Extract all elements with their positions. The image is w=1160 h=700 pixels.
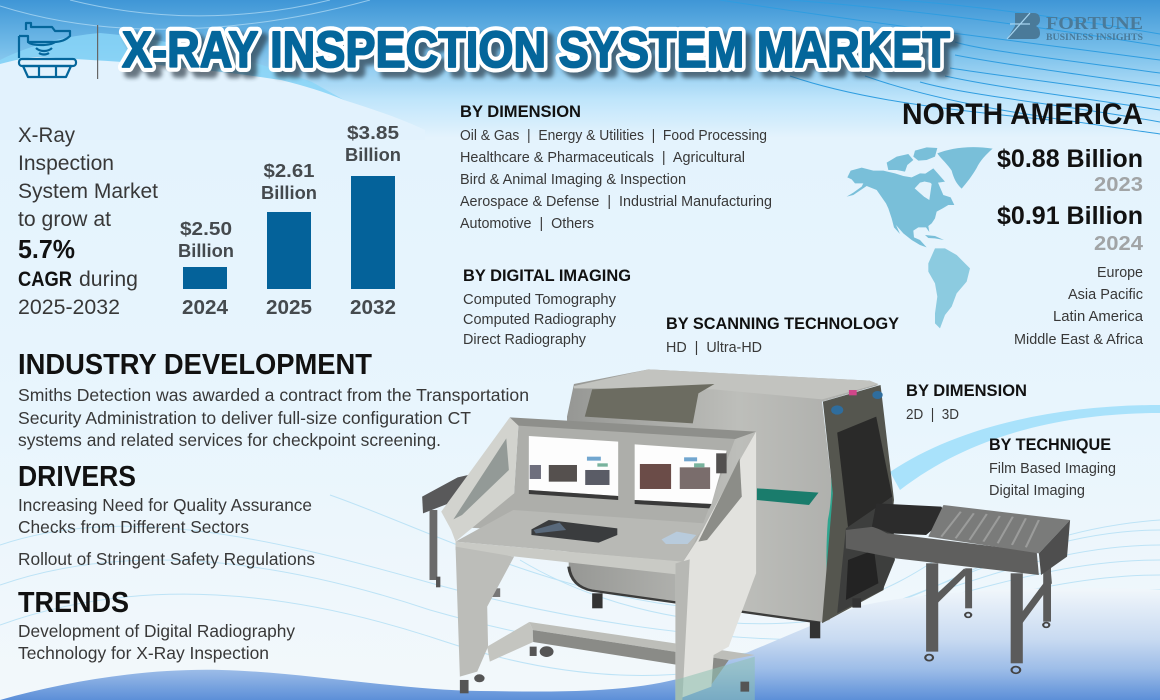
bar 2024: Billion bbox=[178, 240, 234, 261]
right monitor bbox=[635, 444, 727, 508]
segment: by dimension 2d 3d bbox=[906, 381, 1027, 423]
desk left leg bbox=[456, 547, 514, 677]
bar 2024 bbox=[178, 218, 234, 319]
segment: by technique bbox=[989, 435, 1116, 499]
segment: by dimension (industries): Bird & Animal Imaging & Inspection bbox=[460, 171, 686, 188]
bar 2025: Billion bbox=[261, 182, 317, 203]
north america stats: Middle East & Africa bbox=[1014, 331, 1144, 348]
desk surface bbox=[456, 510, 705, 562]
left conveyor bbox=[422, 466, 508, 587]
bar chart bbox=[178, 122, 401, 319]
title: X-RAY INSPECTION SYSTEM MARKET bbox=[122, 21, 950, 78]
desk right panel bbox=[675, 432, 756, 700]
segment: by technique: Digital Imaging bbox=[989, 482, 1085, 499]
segment: by dimension (industries): Automotive | Others bbox=[460, 215, 594, 232]
north america stats: $0.91 Billion bbox=[997, 202, 1143, 230]
segment: by dimension 2d 3d: 2D | 3D bbox=[906, 406, 959, 423]
north america stats: Europe bbox=[1097, 264, 1143, 281]
drivers: Checks from Different Sectors bbox=[18, 517, 249, 537]
hudson bay bbox=[915, 181, 932, 200]
bar 2025: $2.61 bbox=[264, 160, 314, 181]
industry development: INDUSTRY DEVELOPMENT bbox=[18, 349, 372, 381]
desk front edge bbox=[456, 542, 683, 575]
segment: by digital imaging: Direct Radiography bbox=[463, 331, 586, 348]
text: cagr statement: CAGR bbox=[18, 268, 72, 291]
logo: fortune business insights: FORTUNE bbox=[1046, 13, 1143, 33]
desk papers bbox=[662, 532, 696, 544]
divider line bbox=[97, 25, 98, 79]
desk top bar bbox=[510, 417, 756, 439]
trends: Technology for X-Ray Inspection bbox=[18, 643, 269, 663]
scanner body bbox=[567, 369, 878, 623]
drivers: Increasing Need for Quality Assurance bbox=[18, 495, 312, 515]
illustration: x-ray inspection machine bbox=[422, 369, 1070, 700]
south america bbox=[928, 248, 970, 328]
text: cagr statement bbox=[18, 124, 158, 319]
bar 2024: $2.50 bbox=[180, 218, 232, 239]
bar 2024: 2024 bbox=[182, 297, 229, 319]
segment: by technique: BY TECHNIQUE bbox=[989, 435, 1111, 454]
bar 2025: 2025 bbox=[266, 297, 312, 319]
segment: by dimension (industries): Aerospace & Defense | Industrial Manufacturing bbox=[460, 193, 772, 210]
segment: by digital imaging bbox=[463, 266, 631, 348]
north america stats: 2024 bbox=[1094, 233, 1144, 255]
text: cagr statement: X-Ray bbox=[18, 124, 75, 147]
title: X-RAY INSPECTION SYSTEM MARKET bbox=[128, 27, 956, 84]
industry development: systems and related services for checkpoint screening. bbox=[18, 430, 441, 450]
text: cagr statement: 2025-2032 bbox=[18, 296, 120, 319]
north america stats: 2023 bbox=[1094, 174, 1143, 196]
drivers: DRIVERS bbox=[18, 461, 136, 493]
title: X-RAY INSPECTION SYSTEM MARKET bbox=[122, 21, 950, 78]
desk back wall bbox=[453, 425, 735, 542]
bar 2025 bbox=[261, 160, 317, 319]
drivers: Rollout of Stringent Safety Regulations bbox=[18, 549, 315, 569]
caribbean bbox=[925, 235, 944, 240]
segment: by digital imaging: Computed Tomography bbox=[463, 291, 616, 308]
segment: by dimension (industries): BY DIMENSION bbox=[460, 102, 581, 121]
trends: TRENDS bbox=[18, 587, 129, 619]
trends: Development of Digital Radiography bbox=[18, 621, 295, 641]
north america stats: NORTH AMERICA bbox=[902, 98, 1143, 131]
industry development: Security Administration to deliver full-size configuration CT bbox=[18, 408, 471, 428]
segment: by dimension 2d 3d: BY DIMENSION bbox=[906, 381, 1027, 400]
text: cagr statement: Inspection bbox=[18, 152, 114, 175]
segment: by scanning technology bbox=[666, 314, 900, 356]
segment: by dimension (industries): Oil & Gas | Energy & Utilities | Food Processing bbox=[460, 127, 767, 144]
segment: by digital imaging: Computed Radiography bbox=[463, 311, 616, 328]
text: cagr statement: 5.7% bbox=[18, 234, 75, 264]
bar 2032: Billion bbox=[345, 144, 401, 165]
drivers bbox=[18, 461, 315, 569]
text: cagr statement: System Market bbox=[18, 180, 158, 203]
north america stats bbox=[902, 98, 1144, 348]
north america stats: Latin America bbox=[1053, 308, 1144, 325]
north america stats: Asia Pacific bbox=[1068, 286, 1143, 303]
text: cagr statement: to grow at bbox=[18, 208, 111, 231]
bar 2032 bbox=[345, 122, 401, 319]
operator desk bbox=[441, 417, 756, 700]
greenland bbox=[937, 147, 993, 189]
segment: by scanning technology: BY SCANNING TECHNOLOGY bbox=[666, 314, 900, 333]
bar 2032: 2032 bbox=[350, 297, 396, 319]
desk left frame bbox=[441, 417, 518, 542]
segment: by dimension (industries) bbox=[460, 102, 772, 232]
icon: x-ray machine bbox=[19, 23, 76, 77]
trends bbox=[18, 587, 295, 663]
logo: fortune business insights: BUSINESS INSIGHTS bbox=[1046, 33, 1143, 43]
desk wheels bbox=[460, 646, 749, 693]
industry development bbox=[18, 349, 529, 450]
north america landmass bbox=[847, 168, 954, 247]
bar 2032: $3.85 bbox=[347, 122, 399, 143]
text: cagr statement: during bbox=[79, 268, 138, 291]
segment: by dimension (industries): Healthcare & Pharmaceuticals | Agricultural bbox=[460, 149, 745, 166]
north america stats: $0.88 Billion bbox=[997, 145, 1143, 173]
canadian arctic islands bbox=[887, 154, 913, 172]
right conveyor bbox=[846, 503, 1070, 673]
left monitor bbox=[529, 436, 618, 500]
keyboard bbox=[531, 520, 617, 543]
segment: by scanning technology: HD | Ultra-HD bbox=[666, 339, 762, 356]
machine wheels bbox=[491, 588, 861, 638]
map: americas bbox=[847, 147, 993, 328]
segment: by digital imaging: BY DIGITAL IMAGING bbox=[463, 266, 631, 285]
scanner front panel bbox=[822, 385, 895, 623]
industry development: Smiths Detection was awarded a contract from the Transportation bbox=[18, 385, 529, 405]
logo: fortune business insights bbox=[1007, 13, 1143, 43]
segment: by technique: Film Based Imaging bbox=[989, 460, 1116, 477]
desk base rail bbox=[487, 622, 533, 662]
